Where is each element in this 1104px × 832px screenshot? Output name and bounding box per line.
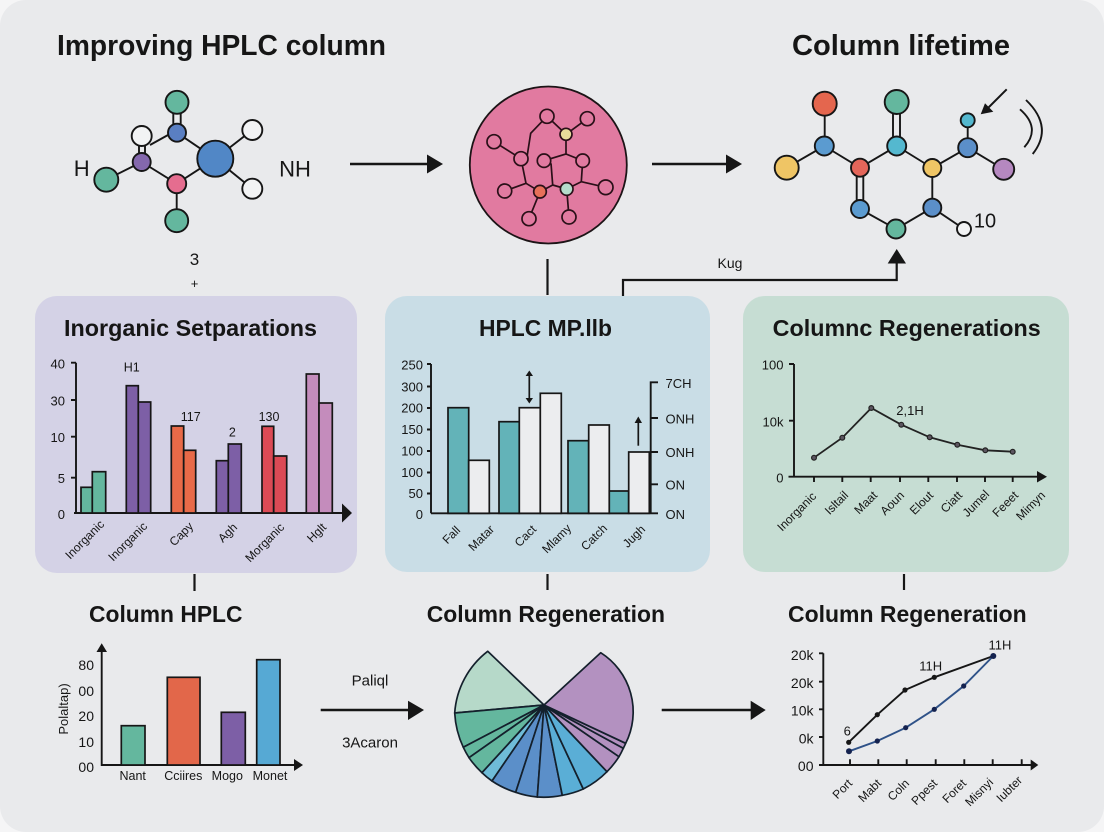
- bar chart: column HPLC: Polaltap): [56, 683, 71, 735]
- line chart: 100: [762, 358, 784, 372]
- bar chart with secondary axis: ONH: [666, 445, 694, 460]
- arrow: pie to line chart: [662, 701, 766, 720]
- line chart: 10k: [763, 414, 784, 430]
- grouped bar chart: 5: [58, 471, 65, 486]
- arrow: molecule to network: [350, 154, 443, 174]
- line chart: Feeet: [990, 488, 1022, 520]
- line chart: two series: Mabt: [855, 776, 885, 805]
- icon: left molecule: [74, 91, 311, 232]
- grouped bar chart: Capy: [166, 519, 196, 549]
- bar chart: column HPLC: 80: [78, 657, 94, 673]
- bar chart: column HPLC: 10: [78, 734, 94, 750]
- line chart: two series: 20k: [791, 647, 814, 663]
- bar chart: column HPLC: [56, 643, 303, 783]
- bar chart with secondary axis: 50: [409, 486, 423, 501]
- bar chart with secondary axis: 100: [401, 465, 423, 480]
- connector: network to HPLC panel: [546, 259, 549, 295]
- grouped bar chart: 130: [259, 410, 279, 424]
- connector arrow: HPLC panel to right molecule: [623, 249, 906, 305]
- line chart: [762, 358, 1048, 534]
- bar chart with secondary axis: Fall: [440, 523, 463, 547]
- label: 3 plus: +: [191, 276, 198, 291]
- connector arrow: HPLC panel to right molecule: Kug: [718, 255, 742, 271]
- label: 3 plus: 3: [190, 250, 199, 269]
- label: 3 plus: [190, 250, 199, 291]
- arrow: bars to pie: 3Acaron: [342, 734, 398, 752]
- grouped bar chart: Inorganic: [62, 517, 107, 562]
- icon: right molecule: [775, 89, 1042, 238]
- line chart: two series: 0k: [799, 730, 814, 746]
- line chart: two series: 11H: [989, 638, 1011, 652]
- connector: left panel to column HPLC: [193, 574, 196, 591]
- panel: column regenerations: [743, 296, 1069, 572]
- grouped bar chart: Inorganic: [105, 519, 150, 564]
- bar chart with secondary axis: [401, 358, 694, 556]
- panel heading: Columnc Regenerations: [773, 315, 1041, 341]
- line chart: Inorganic: [774, 489, 819, 534]
- panel heading: Inorganic Setparations: [64, 315, 317, 341]
- bar chart: column HPLC: 20: [78, 708, 94, 724]
- connector: middle panel to pie: [546, 574, 549, 590]
- bar chart with secondary axis: Cact: [512, 522, 540, 550]
- arrow: bars to pie: Paliql: [352, 672, 388, 690]
- line chart: Mimyn: [1013, 488, 1048, 523]
- grouped bar chart: Hglt: [304, 520, 330, 545]
- grouped bar chart: [51, 356, 352, 565]
- line chart: two series: 11H: [919, 658, 942, 674]
- bar chart with secondary axis: 300: [401, 380, 423, 394]
- grouped bar chart: 2: [229, 425, 236, 439]
- bar chart: column HPLC: 00: [78, 759, 94, 775]
- line chart: Elout: [907, 488, 937, 517]
- line chart: Ciatt: [938, 488, 966, 516]
- title: improving HPLC column: Improving HPLC column: [57, 30, 386, 62]
- bar chart: column HPLC: 00: [78, 683, 94, 699]
- bar chart with secondary axis: Mlamy: [539, 521, 574, 556]
- panel heading: HPLC MP.llb: [479, 315, 612, 341]
- line chart: two series: 10k: [791, 702, 814, 718]
- icon: left molecule: H: [74, 156, 90, 181]
- line chart: two series: Ppest: [909, 776, 941, 808]
- line chart: two series: Iubter: [994, 773, 1025, 805]
- connector: right panel to line chart: [903, 574, 905, 590]
- bar chart with secondary axis: ON: [666, 478, 685, 492]
- bar chart with secondary axis: 100: [401, 444, 423, 458]
- grouped bar chart: 10: [51, 430, 65, 445]
- panel: inorganic separations: [35, 296, 357, 573]
- bar chart with secondary axis: ON: [666, 507, 685, 522]
- line chart: two series: 00: [798, 758, 814, 774]
- grouped bar chart: 0: [58, 507, 65, 522]
- bar chart with secondary axis: Jugh: [620, 522, 648, 551]
- bar chart with secondary axis: 150: [401, 422, 423, 437]
- line chart: Aoun: [877, 488, 907, 518]
- title: column lifetime: Column lifetime: [792, 30, 1010, 62]
- line chart: two series: [791, 638, 1038, 809]
- bar chart with secondary axis: Catch: [578, 521, 610, 553]
- grouped bar chart: H1: [124, 361, 140, 375]
- line chart: Jumel: [960, 487, 992, 520]
- line chart: 0: [776, 470, 784, 486]
- line chart: two series: Coln: [885, 776, 912, 804]
- bar chart: column HPLC: Monet: [253, 769, 288, 783]
- bar chart with secondary axis: ONH: [666, 412, 694, 426]
- arrow: network to lifetime molecule: [652, 154, 742, 174]
- icon: right molecule: 10: [974, 211, 996, 233]
- bar chart with secondary axis: Matar: [466, 522, 497, 554]
- icon: central pink network: [470, 86, 627, 244]
- bar chart: column HPLC: Mogo: [212, 769, 243, 783]
- line chart: Isltail: [822, 488, 851, 517]
- line chart: two series: 6: [844, 724, 851, 738]
- bar chart with secondary axis: 200: [401, 400, 423, 416]
- line chart: 2,1H: [896, 403, 924, 418]
- arrow: bars to pie: [321, 672, 424, 752]
- icon: left molecule: NH: [279, 156, 311, 182]
- grouped bar chart: Agh: [215, 520, 240, 545]
- heading: column regeneration, right: Column Regeneration: [788, 601, 1027, 627]
- bar chart: column HPLC: Cciires: [164, 769, 202, 783]
- bar chart with secondary axis: 250: [401, 358, 423, 372]
- line chart: two series: Misnyi: [962, 775, 996, 809]
- line chart: Maat: [851, 488, 881, 517]
- grouped bar chart: 30: [51, 394, 65, 408]
- bar chart with secondary axis: 7CH: [666, 376, 692, 391]
- line chart: two series: Foret: [939, 776, 970, 806]
- heading: column HPLC: Column HPLC: [89, 601, 242, 627]
- grouped bar chart: 40: [51, 356, 65, 372]
- pie chart: [455, 651, 633, 797]
- panel: HPLC MP.llb: [385, 296, 710, 572]
- line chart: two series: Port: [830, 776, 856, 802]
- bar chart: column HPLC: Nant: [119, 769, 146, 783]
- grouped bar chart: Morganic: [242, 520, 287, 565]
- grouped bar chart: 117: [181, 410, 201, 424]
- line chart: two series: 20k: [791, 675, 814, 691]
- heading: column regeneration, middle: Column Regeneration: [427, 601, 665, 627]
- bar chart with secondary axis: 0: [416, 507, 423, 522]
